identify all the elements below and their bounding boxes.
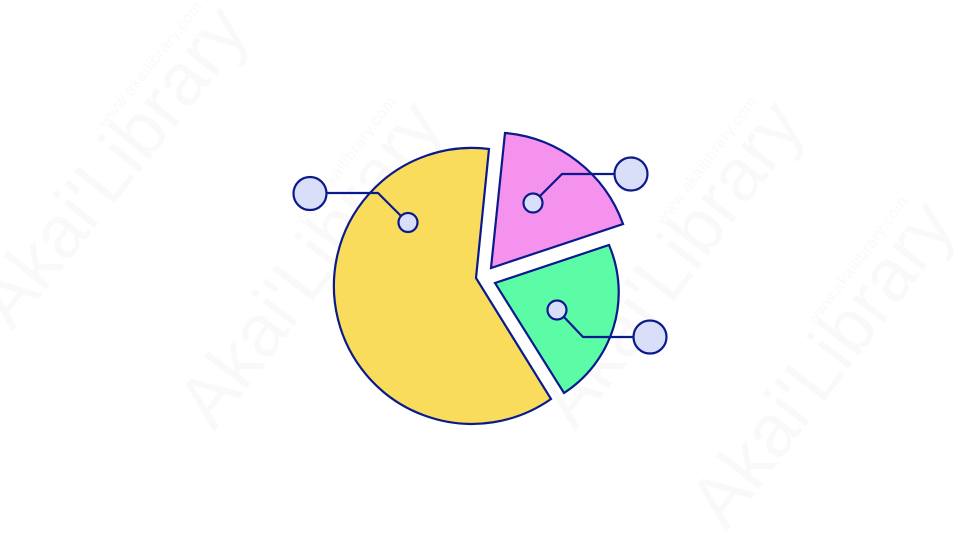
watermark: bottom right: www.akailibrary.com (804, 194, 912, 329)
callout: green slice (548, 300, 666, 354)
watermark: centre left: www.akailibrary.com (292, 94, 400, 229)
callout: pink slice (524, 158, 648, 212)
watermark: top left: www.akailibrary.com (95, 0, 206, 132)
watermark: centre right: Akai'Library (521, 85, 819, 442)
callout: yellow slice (294, 177, 418, 232)
yellow pie slice (334, 148, 551, 424)
watermark: centre left: Akai'Library (160, 85, 458, 442)
pink pie slice (491, 133, 623, 268)
green pie slice (495, 245, 619, 393)
watermark: centre right: www.akailibrary.com (653, 94, 761, 229)
